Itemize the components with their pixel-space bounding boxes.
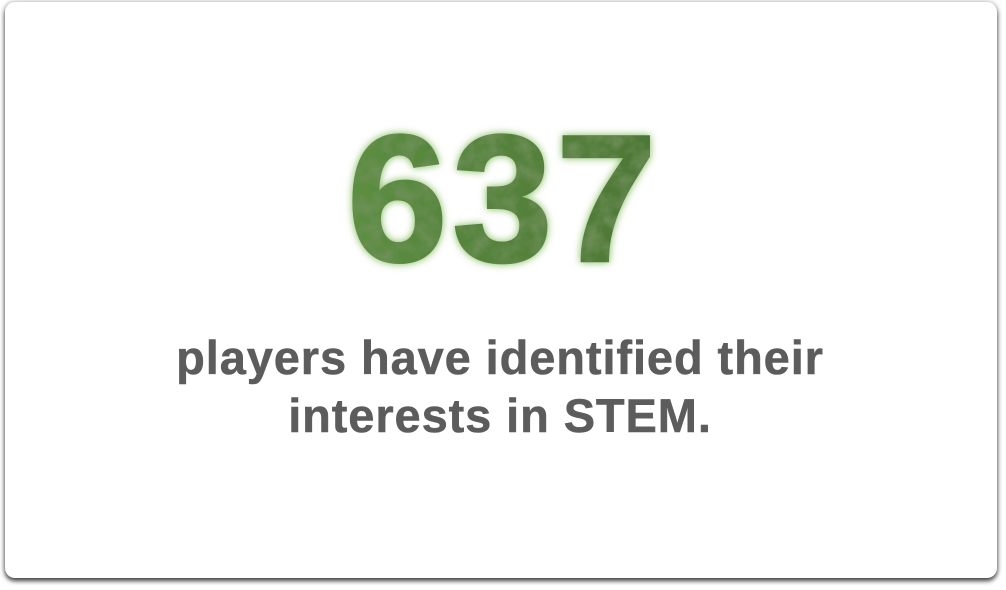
big number 637: 637 [347, 98, 657, 300]
caption text: players have identified their [176, 331, 824, 384]
caption text [176, 331, 824, 442]
big number 637: 637 [347, 98, 657, 300]
caption text: interests in STEM. [288, 389, 712, 442]
